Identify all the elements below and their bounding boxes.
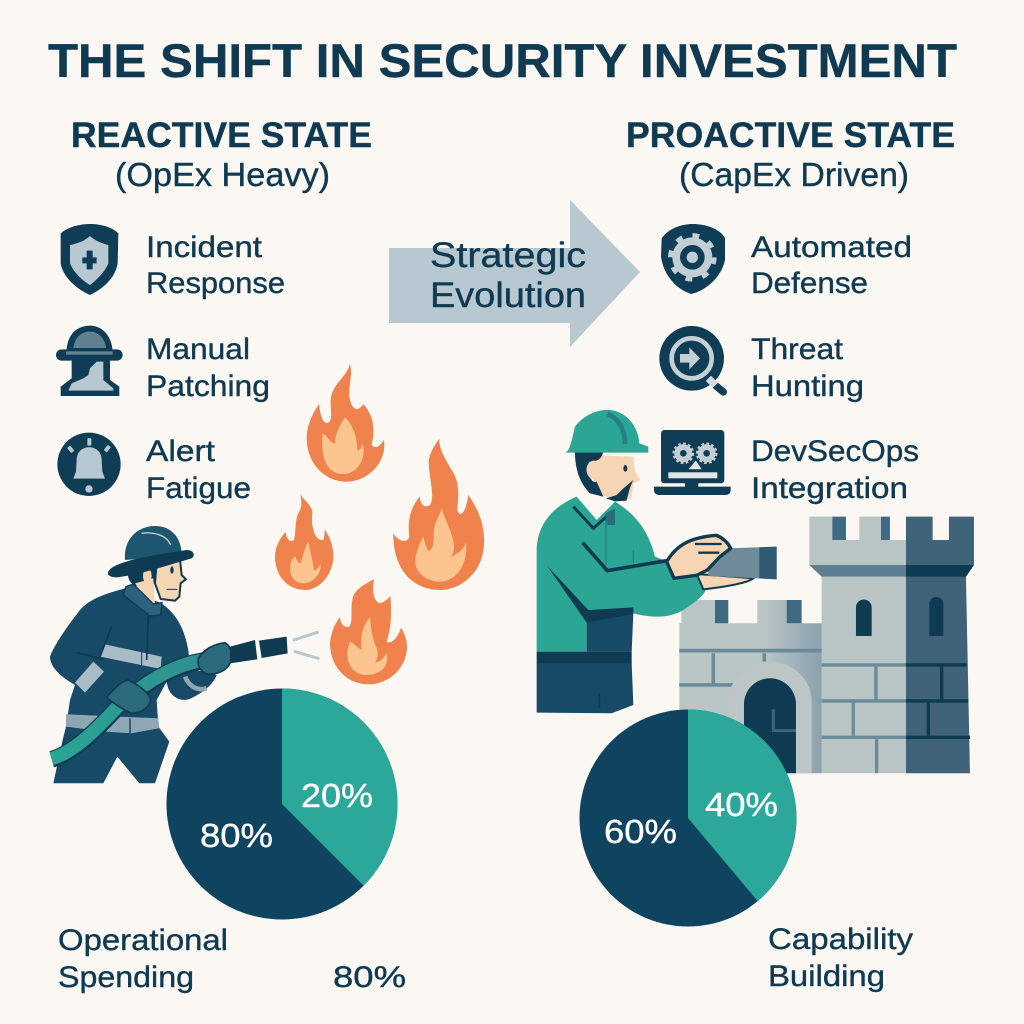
label: manual patching — [146, 333, 270, 403]
firefighter helmet — [108, 526, 194, 577]
heading: reactive state: (OpEx Heavy) — [115, 156, 330, 193]
gloves — [107, 643, 232, 713]
firefighter collar — [123, 584, 162, 616]
pie chart: reactive spending: 80% — [200, 817, 273, 854]
caption: operational spending — [58, 924, 406, 994]
tower bricks dark side — [906, 665, 970, 737]
illustration: firefighter with hose — [50, 526, 318, 783]
label: incident response: Incident — [146, 231, 263, 264]
left wall — [679, 600, 822, 773]
worker collar — [573, 507, 615, 528]
icon: alert bell — [57, 433, 121, 496]
finger lines — [695, 544, 722, 553]
worker torso — [537, 497, 707, 652]
heading: proactive state: PROACTIVE STATE — [626, 116, 955, 155]
reactive icon list — [56, 224, 285, 505]
arm outline — [583, 543, 667, 571]
flame: bottom — [330, 579, 407, 684]
flame: left small — [275, 494, 333, 590]
label: devsecops integration: DevSecOps — [751, 435, 919, 468]
arrow: strategic evolution: Evolution — [430, 276, 586, 315]
pie chart: proactive spending — [580, 710, 796, 926]
tower light side — [809, 517, 906, 773]
flame: right large — [393, 438, 484, 590]
label: manual patching: Manual — [146, 333, 250, 366]
illustration: worker laying brick — [537, 410, 777, 713]
illustration: castle — [679, 517, 974, 773]
worker hard hat — [565, 410, 648, 453]
tower cornice — [809, 565, 906, 577]
caption: operational spending: Operational — [58, 924, 228, 957]
pie chart: reactive spending: 20% — [301, 777, 373, 814]
firefighter body — [50, 588, 217, 783]
reflective bands — [66, 644, 207, 733]
pie chart: proactive spending: 40% — [705, 786, 778, 823]
wall merlon recesses — [715, 600, 802, 623]
label: alert fatigue: Alert — [146, 435, 216, 468]
label: threat hunting — [751, 333, 864, 403]
wall bricks — [679, 651, 822, 685]
heading: proactive state — [626, 116, 955, 193]
hose — [52, 660, 203, 759]
icon: manual patching worker — [56, 326, 123, 396]
icon: devsecops laptop — [654, 430, 731, 495]
tower bricks — [822, 665, 906, 773]
arrow: strategic evolution: Strategic — [430, 236, 586, 275]
label: devsecops integration: Integration — [751, 472, 908, 505]
firefighter neck and head — [127, 559, 186, 603]
worker head — [575, 452, 641, 502]
body fold lines — [77, 615, 148, 660]
label: alert fatigue — [146, 435, 251, 505]
heading: proactive state: (CapEx Driven) — [679, 156, 909, 193]
heading: reactive state: REACTIVE STATE — [71, 116, 372, 155]
label: automated defense — [751, 231, 912, 300]
trouser crease — [597, 693, 602, 708]
caption: capability building: Capability — [768, 923, 913, 956]
worker lower shirt — [587, 613, 633, 652]
tower merlon recesses — [832, 517, 890, 540]
worker upper hand — [667, 535, 731, 578]
worker trousers — [537, 663, 633, 713]
caption: operational spending: 80% — [333, 961, 406, 994]
title: THE SHIFT IN SECURITY INVESTMENT — [48, 34, 957, 87]
label: threat hunting: Hunting — [751, 370, 864, 403]
flames — [275, 364, 484, 684]
arm shadow wedge — [547, 566, 633, 623]
icon: threat hunting magnifier — [659, 326, 724, 392]
label: automated defense: Automated — [751, 231, 912, 264]
label: devsecops integration — [751, 435, 919, 505]
proactive icon list — [654, 224, 919, 505]
icon: automated defense shield gear — [661, 224, 725, 294]
nozzle — [230, 637, 288, 663]
caption: operational spending: Spending — [58, 961, 194, 994]
shirt placket — [606, 517, 633, 565]
arrow: strategic evolution — [389, 200, 640, 347]
label: manual patching: Patching — [146, 370, 270, 403]
caption: capability building — [768, 923, 913, 993]
label: incident response: Response — [146, 267, 285, 300]
pie chart: reactive spending — [166, 688, 398, 920]
pie chart: proactive spending: 60% — [604, 813, 677, 850]
worker belt — [537, 652, 632, 664]
worker lower hand — [697, 574, 753, 589]
label: automated defense: Defense — [751, 267, 868, 300]
flame: top — [307, 364, 384, 482]
label: incident response — [146, 231, 285, 300]
tower dark side — [906, 517, 974, 773]
caption: capability building: Building — [768, 960, 885, 993]
icon: incident response shield — [61, 224, 118, 295]
brick — [708, 547, 777, 579]
tower windows — [856, 597, 943, 636]
door detail — [773, 709, 796, 731]
gate arch — [728, 662, 812, 773]
water spray — [294, 632, 318, 658]
label: threat hunting: Threat — [751, 333, 844, 366]
heading: reactive state — [71, 116, 372, 193]
gate door — [744, 678, 796, 773]
tower cornice dark — [906, 565, 974, 577]
label: alert fatigue: Fatigue — [146, 472, 251, 505]
